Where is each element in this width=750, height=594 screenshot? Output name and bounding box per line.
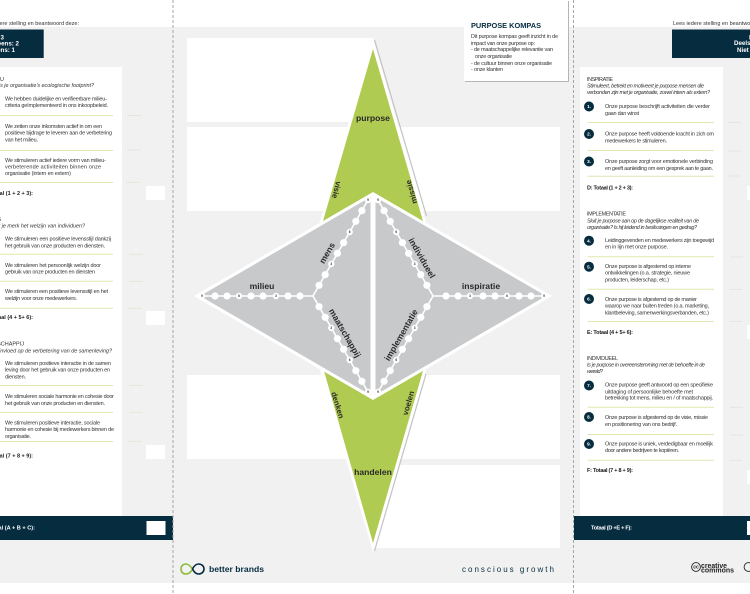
section: mens xyxy=(0,217,113,321)
axis labels: maatschappij xyxy=(327,307,363,359)
scale numbers: 6 xyxy=(395,358,397,362)
kite: right xyxy=(376,197,546,395)
section: implementatie: 5. xyxy=(587,264,591,269)
scale numbers: 9 xyxy=(367,198,369,202)
section: inspiratie: verbonden zijn met je organisatie, zowel intern als extern? xyxy=(587,90,710,96)
card: purpose kompas: PURPOSE KOMPAS xyxy=(471,21,541,30)
section: inspiratie: Stimuleert, betrekt en motiveert je purpose mensen die xyxy=(587,83,704,89)
section: implementatie: 4. xyxy=(587,238,591,243)
section: inspiratie: 3. xyxy=(587,159,591,164)
scale numbers: 9 xyxy=(377,198,379,202)
logo: creative commons: cc xyxy=(693,565,699,571)
scale numbers: 6 xyxy=(506,294,508,298)
triangle labels xyxy=(329,113,419,477)
section: individueel: en positionering van ons bedrijf. xyxy=(605,422,677,428)
scale numbers: 9 xyxy=(377,390,379,394)
card left xyxy=(0,67,122,517)
tagline: conscious growth xyxy=(462,565,554,574)
score boxes right xyxy=(747,186,750,484)
scale numbers: 3 xyxy=(330,326,332,330)
section: implementatie: organisatie? Is hij leidend in beslissingen en gedrag? xyxy=(587,225,697,231)
total bar left xyxy=(0,516,173,540)
section: maatschappij: harmonie en cohesie bij medewerkers binnen de xyxy=(5,427,114,433)
section: implementatie: klantbeleving, samenwerkingsverbanden, etc.) xyxy=(605,310,709,316)
section: inspiratie: gaan dan winst xyxy=(605,111,639,117)
scale numbers xyxy=(201,198,545,394)
scale numbers: 6 xyxy=(349,230,351,234)
section: implementatie: waarop we naar buiten treden (o.a. marketing, xyxy=(604,303,709,309)
section: individueel: 7. xyxy=(587,383,591,388)
section: individueel: door andere bedrijven te kopiëren. xyxy=(605,448,679,454)
scale numbers: 6 xyxy=(395,230,397,234)
axis labels: milieu xyxy=(250,281,274,291)
card: purpose kompas: Dit purpose kompas geeft inzicht in de xyxy=(471,34,558,40)
section: maatschappij: diensten. xyxy=(5,374,26,380)
scale numbers: 9 xyxy=(543,294,545,298)
logo: creative commons: creative xyxy=(701,561,727,570)
section: implementatie: Leidinggevenden en medewerkers zijn toegewijd xyxy=(605,238,714,244)
logo: creative commons: commons xyxy=(701,566,734,575)
scale numbers: 3 xyxy=(469,294,471,298)
section: individueel: Onze purpose is uniek, verdedigbaar en moeilijk xyxy=(605,441,713,447)
section: inspiratie: Onze purpose zorgt voor emotionele verbinding xyxy=(605,159,713,165)
scale numbers: 3 xyxy=(330,262,332,266)
triangle labels: handelen xyxy=(354,467,392,477)
legend box left xyxy=(0,30,44,58)
total bar right xyxy=(574,516,750,540)
section: mens: We stimuleren het persoonlijk welzijn door xyxy=(5,263,101,269)
section: inspiratie: Onze purpose beschrijft activiteiten die verder xyxy=(605,104,710,110)
section: implementatie xyxy=(584,211,714,336)
section: inspiratie: 2. xyxy=(587,132,591,137)
axis labels: individueel xyxy=(406,236,438,280)
panel: right questionnaire xyxy=(574,21,750,540)
section: milieu xyxy=(0,77,113,197)
card: purpose kompas: impact van onze purpose op: xyxy=(471,41,535,47)
section: milieu: We hebben duidelijke en verifieerbare milieu- xyxy=(5,96,107,102)
scale numbers: 6 xyxy=(349,358,351,362)
section: mens: We stimuleren een positieve levensstijl en het xyxy=(5,289,108,295)
section: maatschappij: We stimuleren positieve interactie, sociale xyxy=(5,420,100,426)
section: maatschappij: We stimuleren sociale harmonie en cohesie door xyxy=(5,394,114,400)
score marks right xyxy=(728,122,743,460)
section: mens: welzijn voor onze medewerkers. xyxy=(4,296,77,302)
triangle labels: voelen xyxy=(401,390,416,416)
axis labels: mens xyxy=(317,241,337,265)
card: purpose kompas xyxy=(464,0,569,82)
section: individueel: INDIVIDUEEL xyxy=(587,356,618,362)
section: implementatie: en in lijn met onze purpose. xyxy=(605,244,668,250)
spokes: left xyxy=(199,197,371,395)
triangle: top xyxy=(320,38,426,222)
section: inspiratie: INSPIRATIE xyxy=(587,77,613,83)
section: inspiratie xyxy=(584,77,714,191)
card: purpose kompas: onze organisatie xyxy=(475,54,512,60)
kite: left xyxy=(200,197,370,395)
section: inspiratie: medewerkers te stimuleren. xyxy=(605,138,667,144)
section: inspiratie: 1. xyxy=(587,104,591,109)
fold line right xyxy=(572,0,574,594)
section: individueel xyxy=(584,356,714,474)
section: mens: het gebruik van onze producten en diensten. xyxy=(5,243,105,249)
axis labels: inspiratie xyxy=(462,281,500,291)
legend box right xyxy=(672,30,750,58)
scale numbers: 9 xyxy=(367,390,369,394)
section: individueel: Onze purpose is afgestemd op de visie, missie xyxy=(605,415,708,421)
compass: purpose star xyxy=(194,38,552,552)
section: inspiratie: en geeft aanleiding om een gesprek aan te gaan. xyxy=(605,166,713,172)
card: purpose kompas: - de maatschappelijke relevantie van xyxy=(471,47,553,53)
triangle: bottom xyxy=(320,370,426,552)
section: implementatie: Sluit je purpose aan op de dagelijkse realiteit van de xyxy=(587,218,699,224)
section: implementatie: Onze purpose is afgestemd op interne xyxy=(605,264,691,270)
section: individueel: 8. xyxy=(587,415,591,420)
section: maatschappij: organisatie. xyxy=(5,434,31,440)
triangle labels: purpose xyxy=(356,113,390,123)
section: implementatie: 6. xyxy=(587,297,591,302)
panel: left questionnaire xyxy=(0,21,173,540)
section: milieu: criteria geïmplementeerd in ons inkoopbeleid. xyxy=(5,103,108,109)
diamond: white outline xyxy=(194,192,552,400)
section: milieu: organisatie (intern en extern) xyxy=(5,171,71,177)
triangle labels: denken xyxy=(329,391,346,420)
section: milieu: We stimuleren actief iedere vorm van milieu- xyxy=(5,158,106,164)
scale numbers: 3 xyxy=(414,262,416,266)
logo: better brands xyxy=(181,564,264,574)
axis labels xyxy=(250,236,500,363)
score boxes left xyxy=(146,186,165,459)
section: mens: gebruik van onze producten en diensten xyxy=(5,269,95,275)
section: implementatie: ontwikkelingen (o.a. strategie, nieuwe xyxy=(605,270,690,276)
section: maatschappij: het gebruik van onze producten en diensten. xyxy=(5,401,105,407)
section: implementatie: Onze purpose is afgestemd op de manier xyxy=(605,297,697,303)
fold line left xyxy=(172,0,174,594)
section: milieu: verbeterende activiteiten binnen onze xyxy=(5,164,101,170)
section: inspiratie: Onze purpose heeft voldoende kracht in zich om xyxy=(605,131,714,137)
section: individueel: uitdaging of persoonlijke behoefte met xyxy=(605,389,693,395)
logo: creative commons xyxy=(692,561,750,575)
scale numbers: 6 xyxy=(238,294,240,298)
scale numbers: 3 xyxy=(275,294,277,298)
logo: better brands: better brands xyxy=(209,564,264,574)
section: individueel: F: Totaal (7 + 8 + 9): xyxy=(587,468,633,474)
scale numbers: 3 xyxy=(414,326,416,330)
section: inspiratie: D: Totaal (1 + 2 + 3): xyxy=(587,185,633,191)
section: individueel: Onze purpose geeft antwoord op een specifieke xyxy=(605,382,713,388)
axis labels: implementatie xyxy=(382,307,420,363)
section: milieu: We zetten onze inkomsten actief in om een xyxy=(5,124,102,130)
section: individueel: betrekking tot mens, milieu en / of maatschappij. xyxy=(605,395,713,401)
card right xyxy=(580,67,723,517)
panel: centre background blocks xyxy=(187,38,560,548)
score marks left xyxy=(126,116,143,441)
section: maatschappij xyxy=(0,341,114,459)
section: implementatie: E: Totaal (4 + 5+ 6): xyxy=(587,330,633,336)
section: maatschappij: leving door het gebruik van onze producten en xyxy=(5,367,110,373)
scale numbers: 9 xyxy=(201,294,203,298)
spokes: right xyxy=(375,197,547,395)
section: milieu: van het milieu. xyxy=(5,137,38,143)
section: individueel: 9. xyxy=(587,442,591,447)
card: purpose kompas: - de cultuur binnen onze organisatie xyxy=(471,61,552,67)
triangle labels: visie xyxy=(330,180,343,200)
total bar right: Totaal (D +E + F): xyxy=(591,525,632,531)
section: implementatie: producten, leiderschap, etc.) xyxy=(605,277,669,283)
section: individueel: wereld? xyxy=(587,369,603,375)
section: mens: We stimuleren een positieve levensstijl dankzij xyxy=(5,236,111,242)
icon: infinity xyxy=(181,564,204,574)
triangle labels: missie xyxy=(404,178,419,205)
section: milieu: positieve bijdrage te leveren aan de verbetering xyxy=(5,130,112,136)
section: maatschappij: We stimuleren positieve interactie in de samen xyxy=(5,361,111,367)
section: individueel: Is je purpose in overeenstemming met de behoefte in de xyxy=(587,362,705,368)
section: implementatie: IMPLEMENTATIE xyxy=(587,211,626,217)
card: purpose kompas: - onze klanten xyxy=(471,67,503,73)
